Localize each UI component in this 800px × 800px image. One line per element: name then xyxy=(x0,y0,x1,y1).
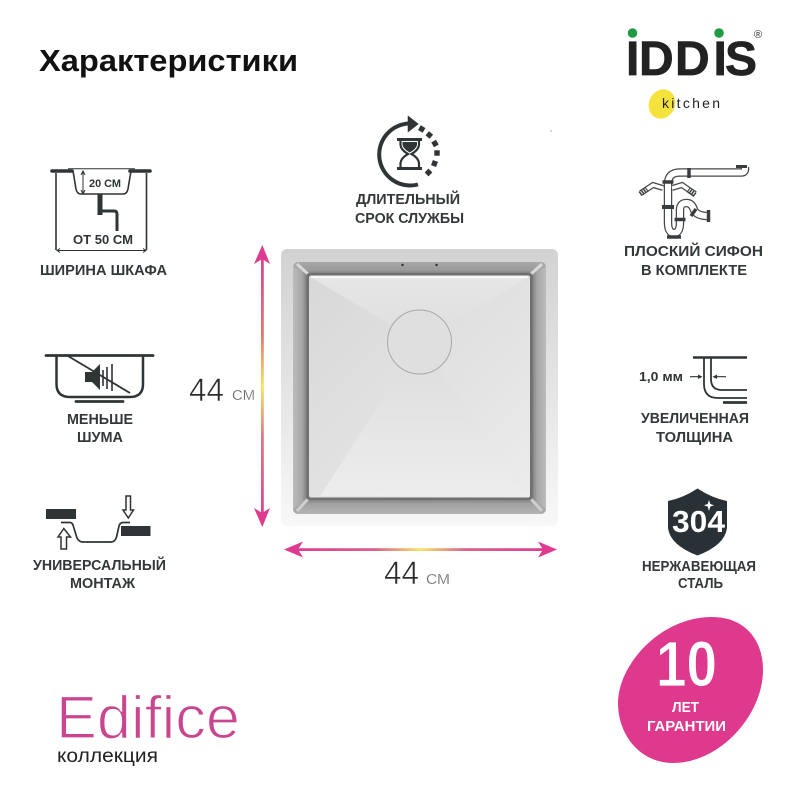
icon: increased thickness: 1,0 мм xyxy=(639,369,683,384)
label: cabinet width: ШИРИНА ШКАФА xyxy=(40,263,168,279)
arrow: height dimension xyxy=(254,245,270,527)
collection name: коллекция xyxy=(57,746,158,767)
label: flat siphon xyxy=(624,242,763,279)
label: universal mounting xyxy=(33,556,166,592)
width value: 44 xyxy=(384,555,419,591)
label: long service life xyxy=(355,190,464,227)
label: increased thickness xyxy=(641,411,749,446)
logo: IDDIS kitchen: kitchen xyxy=(662,95,720,111)
icon: increased thickness xyxy=(639,358,747,402)
logo: IDDIS kitchen xyxy=(626,28,762,123)
icon: less noise xyxy=(46,356,153,402)
icon: siphon xyxy=(640,166,747,237)
collection name: Edifice xyxy=(56,684,240,751)
label: flat siphon: В КОМПЛЕКТЕ xyxy=(641,263,747,279)
badge: 10 years warranty: 10 xyxy=(656,628,717,700)
icon: universal mounting xyxy=(46,496,150,549)
sink photo xyxy=(281,249,558,526)
height value: СМ xyxy=(232,388,255,404)
badge: 10 years warranty: ЛЕТ xyxy=(672,700,699,716)
label: stainless steel: НЕРЖАВЕЮЩАЯ xyxy=(642,559,756,575)
badge: 10 years warranty: ГАРАНТИИ xyxy=(647,719,726,735)
title: Характеристики xyxy=(39,43,298,78)
speck near sink xyxy=(550,130,552,132)
label: increased thickness: ТОЛЩИНА xyxy=(656,430,734,446)
icon: 304 steel shield: 304 xyxy=(672,504,726,539)
logo: IDDIS kitchen: IDDIS xyxy=(626,33,757,86)
label: increased thickness: УВЕЛИЧЕННАЯ xyxy=(641,411,749,427)
label: long service life: СРОК СЛУЖБЫ xyxy=(355,211,464,227)
logo: IDDIS kitchen: ® xyxy=(754,29,762,41)
label: universal mounting: МОНТАЖ xyxy=(70,576,136,592)
icon: cabinet width: ОТ 50 СМ xyxy=(73,232,133,247)
height value: 44 xyxy=(189,372,224,408)
label: stainless steel: СТАЛЬ xyxy=(678,576,723,592)
label: flat siphon: ПЛОСКИЙ СИФОН xyxy=(624,242,763,260)
width value: СМ xyxy=(426,572,450,588)
label: less noise: ШУМА xyxy=(77,430,124,446)
label: universal mounting: УНИВЕРСАЛЬНЫЙ xyxy=(33,556,166,574)
label: long service life: ДЛИТЕЛЬНЫЙ xyxy=(356,190,460,208)
arrow: width dimension xyxy=(284,542,557,558)
badge: 10 years warranty xyxy=(618,617,763,763)
label: less noise: МЕНЬШЕ xyxy=(67,412,133,428)
label: stainless steel xyxy=(642,559,756,592)
height value xyxy=(189,372,255,408)
icon: long service life xyxy=(379,117,440,185)
icon: cabinet width xyxy=(52,169,150,252)
label: less noise xyxy=(67,412,133,446)
width value xyxy=(384,555,450,591)
icon: 304 steel shield xyxy=(668,488,727,556)
icon: cabinet width: 20 СМ xyxy=(89,178,121,190)
